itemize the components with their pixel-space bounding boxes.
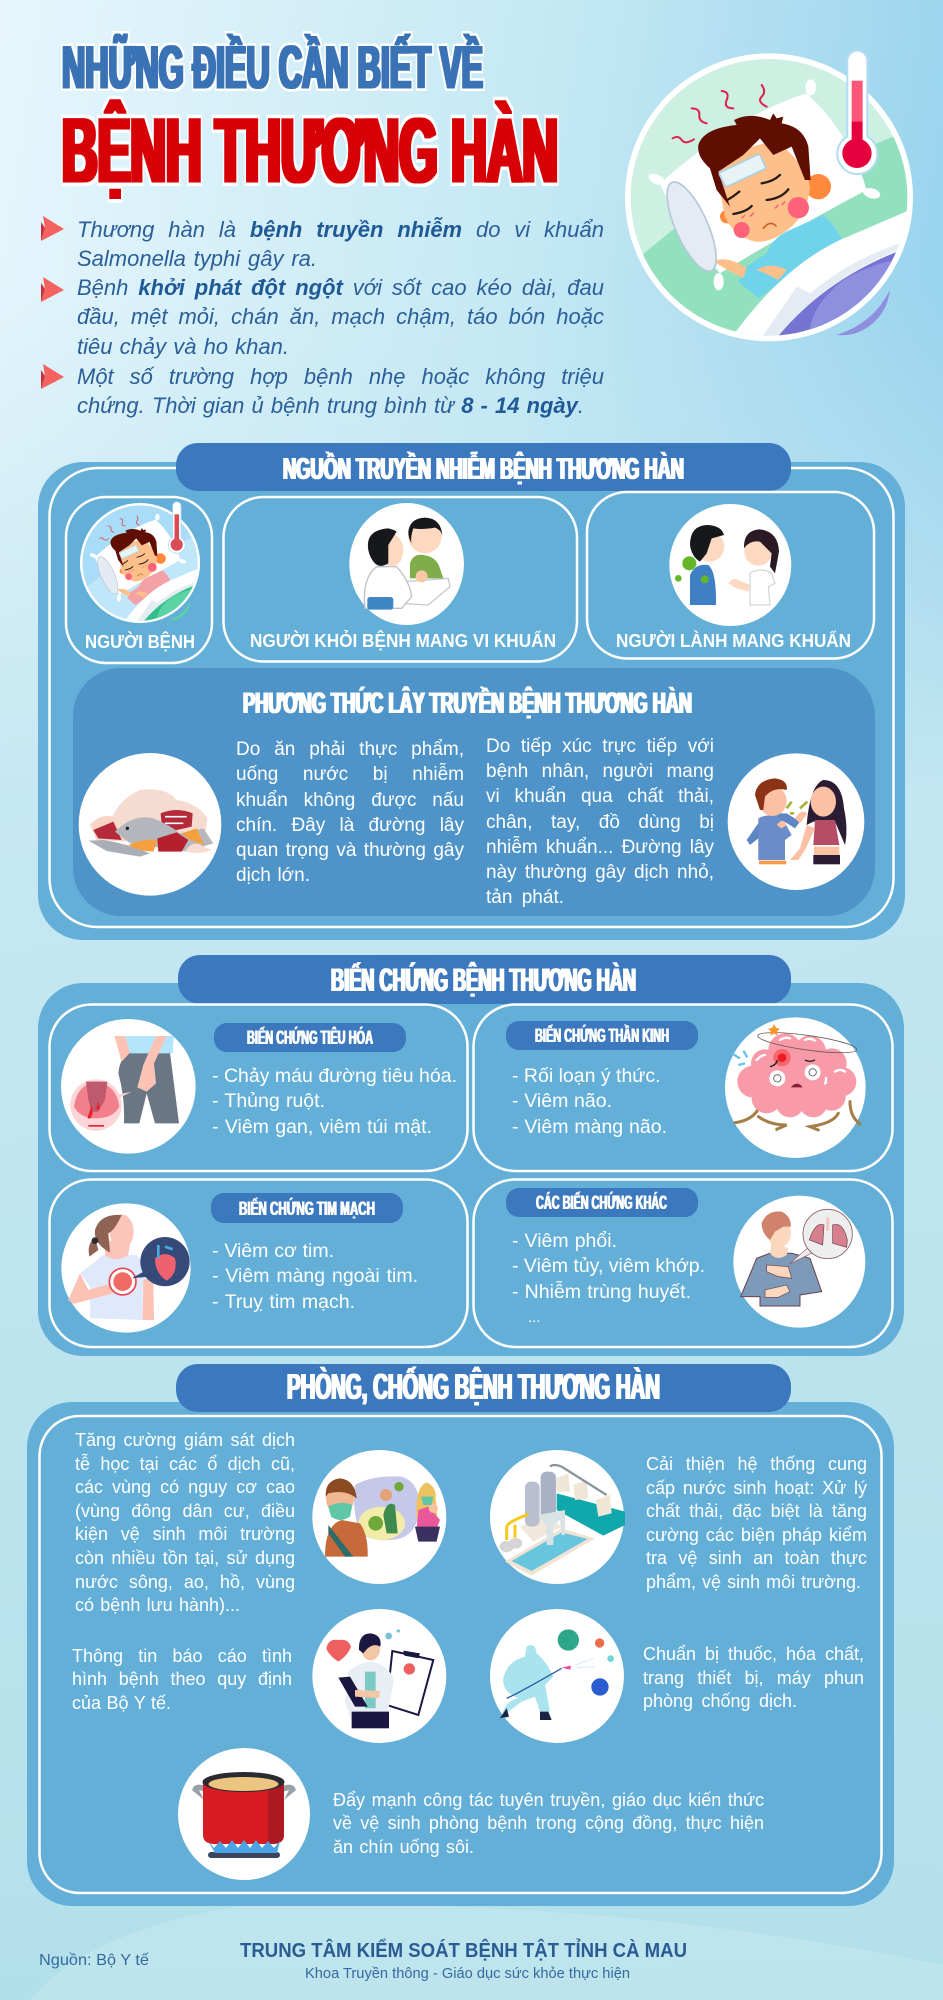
list: - Viêm phổi.	[512, 1230, 617, 1252]
text: chuẩn bị thuốc: Chuẩn bị thuốc, hóa chất,	[643, 1644, 864, 1664]
text: đường ăn uống: quan trọng và thường gây	[236, 840, 464, 861]
intro text 1: Thương hàn là bệnh truyền nhiễm do vi khuẩn	[77, 217, 604, 242]
text: đường tiếp xúc	[486, 734, 718, 914]
text: cấp nước: cấp nước sinh hoạt: Xử lý	[646, 1478, 867, 1498]
card: người bệnh: NGƯỜI BỆNH	[85, 631, 195, 652]
section header pill	[176, 1364, 791, 1412]
icon: woman with heart	[61, 1203, 191, 1333]
text: đường tiếp xúc: Do tiếp xúc trực tiếp với	[486, 736, 714, 757]
icon: carrier and nurse	[669, 504, 791, 626]
text: giám sát dịch tễ: tễ học tại các ổ dịch cũ,	[75, 1454, 295, 1474]
text: tuyên truyền	[333, 1789, 769, 1864]
bullet icon 2	[41, 277, 64, 302]
text: báo cáo tình hình: hình bệnh theo quy định	[72, 1669, 292, 1689]
list: - Viêm tủy, viêm khớp.	[512, 1255, 705, 1277]
text: giám sát dịch tễ: nước sông, ao, hồ, vùng	[75, 1572, 295, 1592]
footer organisation: Khoa Truyền thông - Giáo dục sức khỏe thực hiện	[305, 1965, 630, 1982]
text: tuyên truyền: ăn chín uống sôi.	[333, 1837, 474, 1857]
list: - Viêm gan, viêm túi mật.	[212, 1116, 432, 1138]
text: cấp nước: Cải thiện hệ thống cung	[646, 1454, 867, 1474]
list: - Viêm màng ngoài tim.	[212, 1265, 418, 1287]
text: cấp nước: tra vệ sinh an toàn thực	[646, 1548, 867, 1568]
text: giám sát dịch tễ: (vùng đông dân cư, điều	[75, 1501, 295, 1521]
list: - Truỵ tim mạch.	[212, 1290, 355, 1312]
panel: nguồn truyền nhiễm	[38, 443, 905, 940]
section header pill	[176, 443, 791, 491]
section header pill: BIẾN CHỨNG BỆNH THƯƠNG HÀN	[331, 962, 636, 998]
list: - Viêm não.	[512, 1090, 612, 1112]
list: - Thủng ruột.	[212, 1090, 325, 1112]
text: đường tiếp xúc: bệnh nhân, người mang	[486, 761, 714, 782]
icon: sick boy with thermometer	[625, 51, 913, 347]
card: biến chứng thần kinh	[474, 1004, 892, 1171]
bullet icon 3	[41, 364, 64, 389]
text: đường tiếp xúc: nhiễm khuẩn... Đường lây	[486, 837, 714, 858]
icon: abdominal pain	[61, 1019, 196, 1154]
text: báo cáo tình hình: của Bộ Y tế.	[72, 1693, 171, 1713]
sub-heading pill: BIẾN CHỨNG TIÊU HÓA	[247, 1025, 373, 1049]
text: đường tiếp xúc: tản phát.	[486, 887, 564, 908]
intro text 2	[77, 273, 607, 363]
title	[62, 34, 558, 202]
sub-heading pill: CÁC BIẾN CHỨNG KHÁC	[536, 1190, 667, 1214]
text: giám sát dịch tễ	[75, 1429, 299, 1624]
text: đường ăn uống: chín. Đây là đường lây	[236, 815, 464, 836]
list	[212, 1238, 462, 1318]
list	[512, 1064, 712, 1144]
intro text 2: Bệnh khởi phát đột ngột với sốt cao kéo dài, đau	[77, 275, 604, 300]
card: các biến chứng khác	[474, 1180, 892, 1347]
source note: Nguồn: Bộ Y tế	[39, 1952, 149, 1969]
icon: sick patient	[80, 502, 200, 625]
panel: biến chứng	[38, 955, 904, 1356]
text: đường ăn uống: Do ăn phải thực phẩm,	[236, 739, 464, 760]
text: chuẩn bị thuốc	[643, 1643, 869, 1718]
text: báo cáo tình hình: Thông tin báo cáo tình	[72, 1646, 292, 1666]
sub-heading pill: BIẾN CHỨNG TIM MẠCH	[239, 1196, 375, 1220]
text: giám sát dịch tễ: còn nhiều tồn tại, sử dụng	[75, 1548, 295, 1568]
card: người khỏi bệnh	[224, 497, 577, 662]
text: tuyên truyền: về vệ sinh phòng bệnh trong cộng đồng, thực hiện	[333, 1813, 764, 1833]
sub-heading pill	[506, 1188, 698, 1217]
icons: masks, water system, doctor, disinfection	[312, 1450, 625, 1743]
footer organisation	[240, 1938, 687, 1982]
text: cấp nước: phẩm, vệ sinh môi trường.	[646, 1572, 861, 1592]
intro text 3: Một số trường hợp bệnh nhẹ hoặc không triệu	[77, 364, 604, 389]
icon: disinfection worker	[490, 1609, 624, 1743]
text: giám sát dịch tễ: kiện vệ sinh môi trường	[75, 1524, 295, 1544]
icon: man with lungs	[733, 1196, 865, 1328]
card: người bệnh	[66, 497, 212, 663]
card: người lành mang khuẩn	[587, 492, 874, 658]
text: đường ăn uống	[236, 737, 468, 892]
text: đường ăn uống: khuẩn không được nấu	[236, 790, 464, 811]
text: tuyên truyền: Đẩy mạnh công tác tuyên truyền, giáo dục kiến thức	[333, 1790, 764, 1810]
card: biến chứng tiêu hóa	[50, 1004, 468, 1171]
list: - Chảy máu đường tiêu hóa.	[212, 1064, 457, 1086]
icon: doctor and patient	[349, 503, 464, 625]
list	[512, 1228, 722, 1334]
sub-heading pill	[214, 1023, 406, 1052]
card: người lành mang khuẩn: NGƯỜI LÀNH MANG KHUẨN	[616, 630, 851, 651]
text: báo cáo tình hình	[72, 1645, 296, 1720]
icon: doctor with clipboard	[312, 1609, 446, 1743]
intro bullets	[41, 215, 607, 422]
card: biến chứng tim mạch	[50, 1180, 468, 1347]
icon: water system	[490, 1450, 625, 1584]
icon: dizzy brain	[725, 1017, 866, 1158]
intro text 2: tiêu chảy và ho khan.	[77, 334, 289, 359]
section header pill: PHÒNG, CHỐNG BỆNH THƯƠNG HÀN	[287, 1365, 660, 1407]
text: cấp nước: chất thải, đặc biệt là tăng	[646, 1501, 867, 1521]
card: người khỏi bệnh: NGƯỜI KHỎI BỆNH MANG VI KHUẨN	[250, 630, 556, 651]
text: chuẩn bị thuốc: trang thiết bị, máy phun	[643, 1668, 864, 1688]
list	[212, 1064, 462, 1144]
icon: boiling pot	[178, 1748, 310, 1880]
list: - Viêm màng não.	[512, 1116, 667, 1138]
panel: phòng chống	[27, 1364, 894, 1906]
list: - Rối loạn ý thức.	[512, 1064, 661, 1086]
sub-heading pill: BIẾN CHỨNG THẦN KINH	[535, 1023, 669, 1047]
list: - Viêm cơ tim.	[212, 1240, 334, 1262]
intro text 2: đầu, mệt mỏi, chán ăn, mạch chậm, táo bón hoặc	[77, 304, 604, 329]
icon: raw food	[79, 753, 221, 896]
footer organisation: TRUNG TÂM KIỂM SOÁT BỆNH TẬT TỈNH CÀ MAU	[240, 1938, 687, 1962]
icon: man and woman contact	[728, 753, 864, 890]
sub-panel: phương thức lây truyền	[73, 668, 875, 916]
intro text 3	[77, 362, 607, 422]
text: đường ăn uống: uống nước bị nhiễm	[236, 764, 464, 785]
text: cấp nước	[646, 1453, 872, 1603]
intro text 3: chứng. Thời gian ủ bệnh trung bình từ 8 - 14 ngày.	[77, 393, 584, 418]
bullet icon 1	[41, 216, 64, 241]
sub-heading pill	[211, 1193, 403, 1223]
text: giám sát dịch tễ: có bệnh lưu hành)...	[75, 1595, 240, 1615]
heading line: những điều cần biết về: NHỮNG ĐIỀU CẦN BIẾT VỀ	[62, 34, 483, 101]
text: giám sát dịch tễ: Tăng cường giám sát dịch	[75, 1430, 295, 1450]
text: cấp nước: cường các biện pháp kiểm	[646, 1525, 867, 1545]
intro text 1: Salmonella typhi gây ra.	[77, 246, 317, 271]
section header pill	[178, 955, 791, 1004]
sub-heading pill	[506, 1021, 698, 1050]
list: ...	[528, 1309, 541, 1326]
text: đường ăn uống: dịch lớn.	[236, 865, 310, 886]
icon: masked people	[312, 1450, 446, 1584]
text: chuẩn bị thuốc: phòng chống dịch.	[643, 1691, 797, 1711]
text: giám sát dịch tễ: các vùng có nguy cơ cao	[75, 1477, 295, 1497]
text: đường tiếp xúc: vi khuẩn qua chất thải,	[486, 786, 714, 807]
intro text 1	[77, 215, 607, 275]
list: - Nhiễm trùng huyết.	[512, 1280, 691, 1302]
text: đường tiếp xúc: chân, tay, đồ dùng bị	[486, 812, 714, 833]
text: đường tiếp xúc: này thường gây dịch nhỏ,	[486, 862, 714, 883]
